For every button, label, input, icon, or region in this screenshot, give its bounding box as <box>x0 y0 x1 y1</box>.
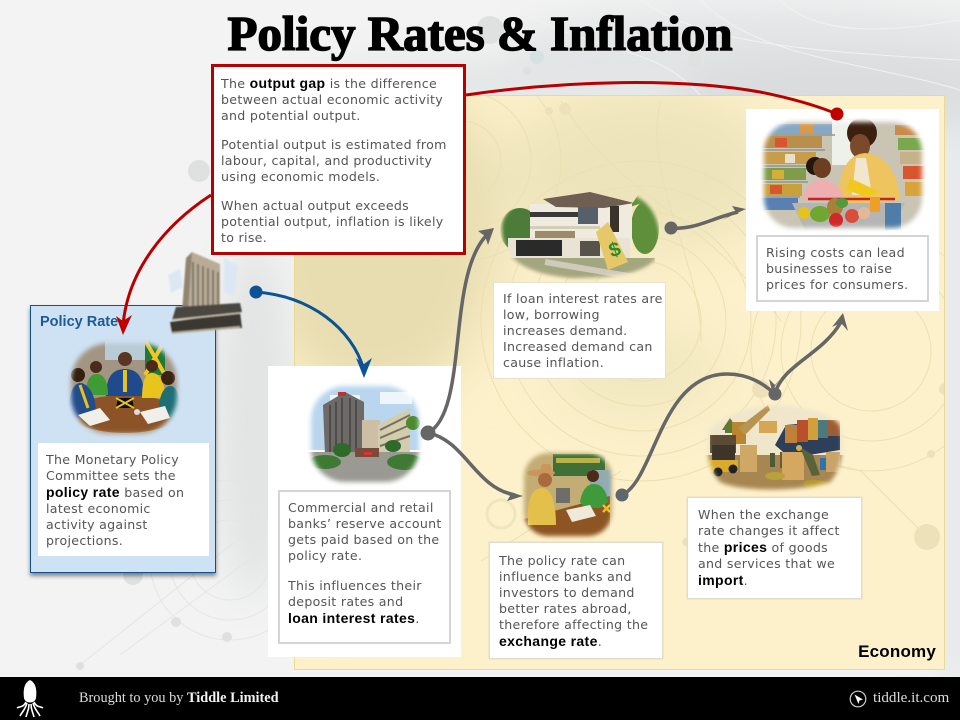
text: output gap explanation: potential output, inflation is likely <box>221 214 444 229</box>
panel: economy <box>294 95 945 670</box>
text: policy rate description: policy rate based on <box>46 484 184 500</box>
panel: consumer prices <box>746 109 939 311</box>
panel: policy rate <box>30 305 216 573</box>
panel: output gap <box>211 64 466 255</box>
icon: octopus logo <box>16 680 44 718</box>
arrow: banks to housing demand <box>420 228 494 440</box>
text: loan demand description: If loan interest rates are <box>503 291 663 306</box>
image: central bank building <box>168 252 243 335</box>
text box: consumer prices <box>756 235 929 302</box>
text: output gap explanation <box>220 75 447 245</box>
text: policy rate description: Committee sets the <box>46 468 176 483</box>
text: banks description: loan interest rates. <box>288 610 420 626</box>
text: imports description <box>698 507 840 588</box>
text box: banks <box>278 490 451 644</box>
text: exchange rate description: better rates abroad, <box>499 601 632 616</box>
text: banks description: Commercial and retail <box>288 500 434 515</box>
text: loan demand description: low, borrowing <box>503 307 600 322</box>
text: imports description: and services that we <box>698 556 835 571</box>
arrow: central bank to commercial banks <box>250 286 372 378</box>
arrow: exchange rate to imports <box>616 374 775 502</box>
text: policy rate description: projections. <box>46 533 123 548</box>
arrow: housing demand to consumer prices <box>664 206 746 234</box>
text: consumer prices description: prices for consumers. <box>766 277 908 292</box>
text: banks description: banks’ reserve account <box>288 516 442 531</box>
text: banks description: This influences their <box>288 578 422 593</box>
text: imports description: When the exchange <box>698 507 829 522</box>
text: output gap explanation: and potential output. <box>221 108 361 123</box>
image: currency exchange <box>521 450 615 540</box>
text: exchange rate description: exchange rate. <box>499 633 602 649</box>
text: banks description <box>288 500 442 626</box>
text: consumer prices description <box>766 245 908 292</box>
text: exchange rate description: therefore affecting the <box>499 617 648 632</box>
text: output gap explanation: to rise. <box>221 230 267 245</box>
text: loan demand description: Increased demand can <box>503 339 653 354</box>
text: imports description: rate changes it affect <box>698 523 840 538</box>
text: loan demand description <box>503 291 663 370</box>
heading: policy rate: Policy Rate <box>40 314 118 330</box>
footer <box>0 677 960 720</box>
image: port imports <box>705 404 844 492</box>
text box: exchange rate <box>490 543 662 658</box>
text: exchange rate description: The policy rate can <box>499 553 625 568</box>
text: exchange rate description: investors to demand <box>499 585 635 600</box>
text: loan demand description: cause inflation. <box>503 355 604 370</box>
text: banks description: gets paid based on the <box>288 532 439 547</box>
arrow: imports to consumer prices <box>768 313 848 400</box>
text: output gap explanation: When actual output exceeds <box>221 198 409 213</box>
label: economy: Economy <box>858 642 936 661</box>
text: exchange rate description <box>498 553 648 649</box>
text: policy rate description: latest economic <box>46 501 151 516</box>
title: Policy Rates & Inflation <box>228 6 732 61</box>
text box: imports <box>688 498 861 598</box>
text: loan demand description: increases demand. <box>503 323 627 338</box>
text: imports description: import. <box>698 572 748 588</box>
arrow: consumer prices to output gap <box>466 83 844 120</box>
icon: cursor <box>850 690 866 708</box>
text: output gap explanation: using economic models. <box>221 169 380 184</box>
text: output gap explanation: labour, capital, and productivity <box>221 153 432 168</box>
text box: loan demand <box>494 283 665 378</box>
text: policy rate description: The Monetary Policy <box>46 452 179 467</box>
$ tag glyph: $ <box>606 238 624 262</box>
text: imports description: the prices of goods <box>698 539 828 555</box>
text: exchange rate description: influence banks and <box>499 569 632 584</box>
text: policy rate description <box>46 452 184 548</box>
arrow: banks to exchange rate <box>428 433 523 501</box>
text: consumer prices description: Rising costs can lead <box>766 245 905 260</box>
text: website: tiddle.it.com <box>873 690 949 706</box>
text: output gap explanation: The output gap is the difference <box>221 75 437 91</box>
text: brought to you by: Brought to you by Tiddle Limited <box>79 690 279 706</box>
image: committee meeting <box>68 340 180 438</box>
text: output gap explanation: Potential output is estimated from <box>221 137 447 152</box>
text: policy rate description: activity against <box>46 517 148 532</box>
panel: commercial banks <box>268 366 461 657</box>
text: banks description: deposit rates and <box>288 594 403 609</box>
text box: policy rate <box>38 443 209 556</box>
text: banks description: policy rate. <box>288 548 362 563</box>
image: bank buildings <box>308 384 422 485</box>
image: house with price tag <box>500 192 659 280</box>
text: output gap explanation: between actual economic activity <box>221 92 443 107</box>
arrow: output gap to policy rate <box>116 195 211 335</box>
text: consumer prices description: businesses to raise <box>766 261 892 276</box>
image: family shopping <box>760 118 926 231</box>
